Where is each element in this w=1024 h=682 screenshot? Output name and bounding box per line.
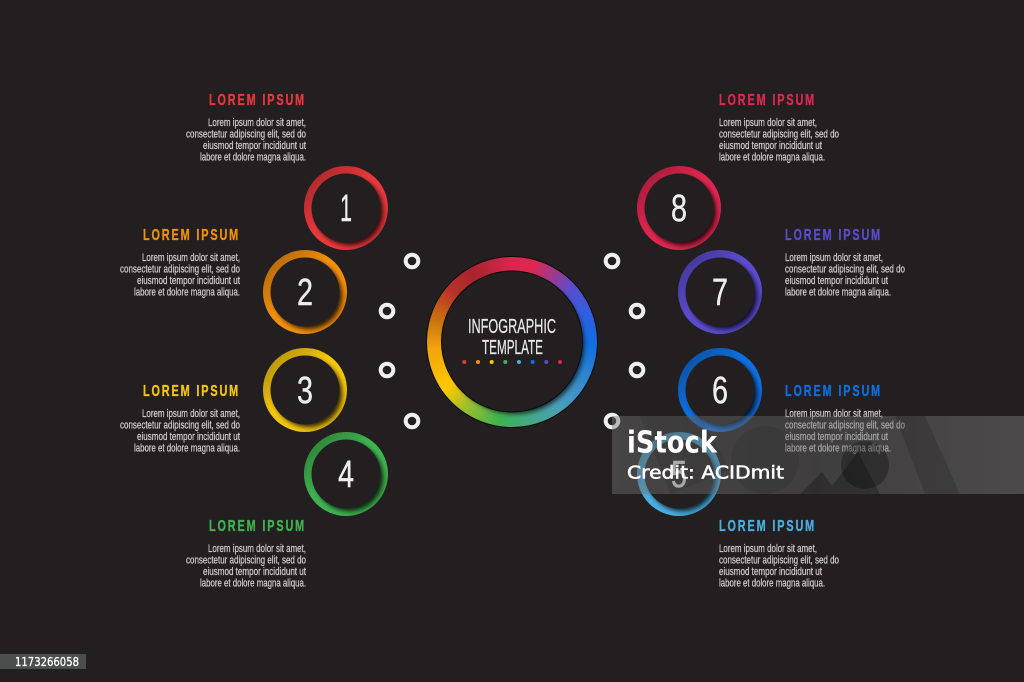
step 7 ring	[678, 250, 762, 334]
text block 4: eiusmod tempor incididunt ut	[203, 566, 306, 578]
step 7 ring: 7	[712, 272, 728, 314]
text block 2: eiusmod tempor incididunt ut	[137, 275, 240, 287]
text block 7: Lorem ipsum dolor sit amet,	[785, 252, 883, 264]
text block 2: Lorem ipsum dolor sit amet,	[142, 252, 240, 264]
text block 5: Lorem ipsum dolor sit amet,	[719, 543, 817, 555]
watermark band	[612, 416, 1024, 494]
text block 4: labore et dolore magna aliqua.	[200, 578, 306, 590]
text block 4	[186, 517, 306, 590]
step 6 ring: 6	[712, 370, 728, 412]
connector dots left	[381, 255, 418, 427]
watermark logo: iStock	[627, 426, 718, 460]
text block 8: labore et dolore magna aliqua.	[719, 152, 825, 164]
text block 7: eiusmod tempor incididunt ut	[785, 275, 888, 287]
text block 2: labore et dolore magna aliqua.	[134, 286, 240, 298]
text block 1: eiusmod tempor incididunt ut	[203, 140, 306, 152]
step 5 ring: 5	[671, 454, 687, 496]
step 4 ring	[304, 432, 388, 516]
connector dots right	[606, 255, 643, 427]
text block 8	[719, 91, 839, 164]
text block 4: consectetur adipiscing elit, sed do	[186, 554, 306, 566]
text block 2: consectetur adipiscing elit, sed do	[120, 264, 240, 276]
step 5 ring	[637, 432, 721, 516]
text block 7: consectetur adipiscing elit, sed do	[785, 264, 905, 276]
text block 8: LOREM IPSUM	[719, 91, 814, 108]
text block 6	[785, 382, 905, 454]
text block 7: labore et dolore magna aliqua.	[785, 286, 891, 298]
text block 1: Lorem ipsum dolor sit amet,	[208, 117, 306, 129]
step 6 ring	[678, 348, 762, 432]
text block 6: Lorem ipsum dolor sit amet,	[785, 408, 883, 420]
text block 5: LOREM IPSUM	[719, 517, 814, 534]
text block 5: labore et dolore magna aliqua.	[719, 578, 825, 590]
text block 5: eiusmod tempor incididunt ut	[719, 566, 822, 578]
step 8 ring: 8	[671, 188, 687, 230]
text block 6: eiusmod tempor incididunt ut	[785, 431, 888, 443]
central ring	[427, 256, 597, 426]
text block 6: consectetur adipiscing elit, sed do	[785, 420, 905, 432]
text block 7	[785, 226, 905, 298]
text block 3: labore et dolore magna aliqua.	[134, 442, 240, 454]
text block 2: LOREM IPSUM	[143, 226, 238, 243]
text block 1: labore et dolore magna aliqua.	[200, 152, 306, 164]
text block 1	[186, 91, 306, 164]
text block 6: LOREM IPSUM	[785, 382, 880, 399]
colored dots row	[462, 360, 562, 364]
text block 1: consectetur adipiscing elit, sed do	[186, 128, 306, 140]
text block 3: eiusmod tempor incididunt ut	[137, 431, 240, 443]
image id tag: 1173266058	[15, 655, 79, 669]
watermark credit: Credit: ACIDmit	[627, 462, 784, 484]
step 2 ring: 2	[297, 272, 313, 314]
central circle label	[442, 271, 584, 414]
step 2 ring	[263, 250, 347, 334]
text block 5: consectetur adipiscing elit, sed do	[719, 554, 839, 566]
text block 3: Lorem ipsum dolor sit amet,	[142, 408, 240, 420]
central title: INFOGRAPHIC	[468, 316, 556, 338]
text block 8: consectetur adipiscing elit, sed do	[719, 128, 839, 140]
step 4 ring: 4	[338, 454, 354, 496]
text block 1: LOREM IPSUM	[209, 91, 304, 108]
step 1 ring	[304, 166, 388, 250]
step 8 ring	[637, 166, 721, 250]
text block 6: labore et dolore magna aliqua.	[785, 442, 891, 454]
text block 7: LOREM IPSUM	[785, 226, 880, 243]
step 3 ring: 3	[297, 370, 313, 412]
text block 8: eiusmod tempor incididunt ut	[719, 140, 822, 152]
text block 2	[120, 226, 240, 298]
text block 5	[719, 517, 839, 590]
step 1 ring: 1	[340, 188, 352, 230]
text block 3	[120, 382, 240, 454]
central subtitle: TEMPLATE	[482, 337, 543, 359]
text block 4: Lorem ipsum dolor sit amet,	[208, 543, 306, 555]
text block 3: LOREM IPSUM	[143, 382, 238, 399]
text block 3: consectetur adipiscing elit, sed do	[120, 420, 240, 432]
step 3 ring	[263, 348, 347, 432]
text block 4: LOREM IPSUM	[209, 517, 304, 534]
text block 8: Lorem ipsum dolor sit amet,	[719, 117, 817, 129]
